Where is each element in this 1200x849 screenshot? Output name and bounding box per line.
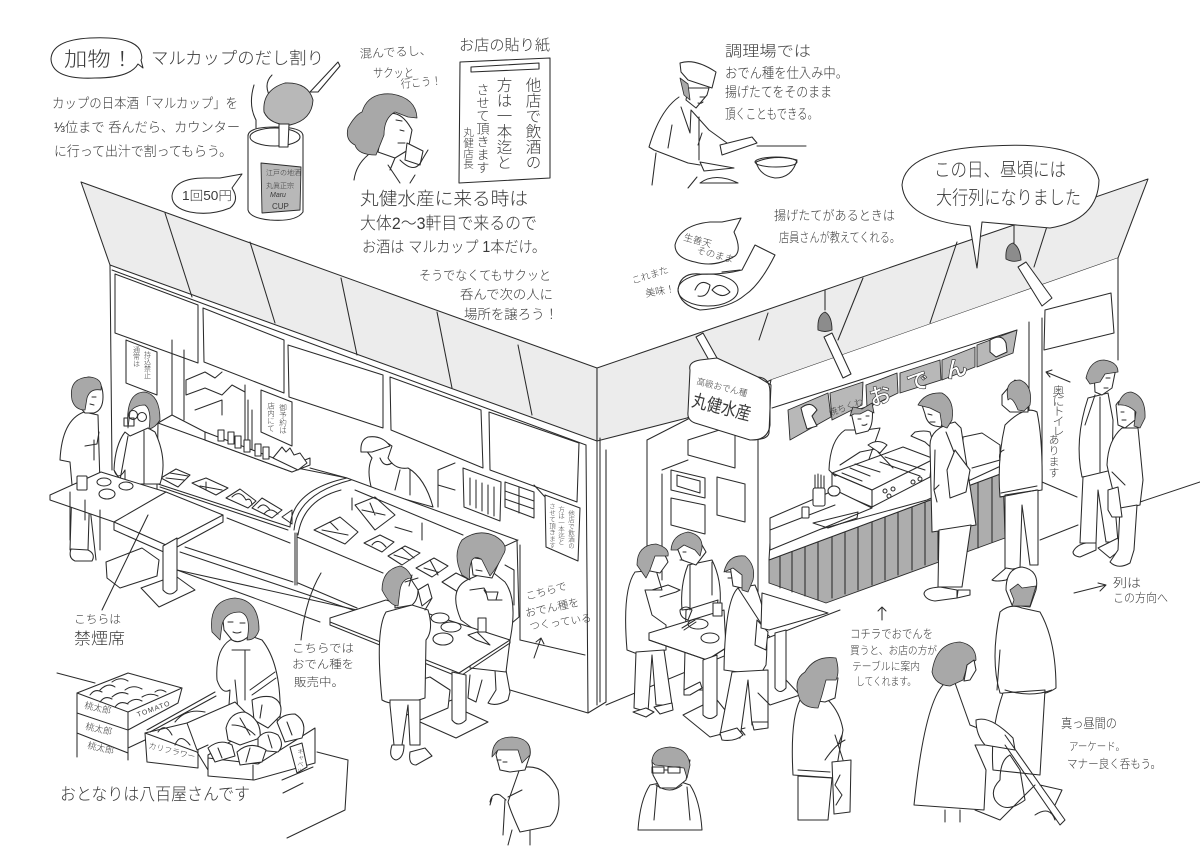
arrow: making oden bbox=[534, 638, 544, 658]
man from behind with stroller woman bbox=[914, 567, 1065, 825]
panel: right stall facade bbox=[597, 179, 1200, 705]
text block: manners bbox=[1061, 716, 1161, 771]
side panels bbox=[671, 425, 745, 534]
poster: shop notice: 方は一本迄と bbox=[494, 77, 512, 170]
arrow: order here bbox=[878, 607, 886, 620]
table top left bbox=[50, 472, 223, 545]
text block: how I visit: お酒は マルカップ 1本だけ。 bbox=[362, 238, 546, 256]
woman eating bbox=[456, 533, 514, 704]
text block: guide to table: テーブルに案内 bbox=[852, 659, 920, 673]
cup label: 江戸の地酒 bbox=[266, 168, 301, 177]
text block: toilet: 奥にトイレ bbox=[1051, 385, 1065, 436]
text block: give up your place: そうでなくてもサクッと bbox=[419, 268, 551, 283]
man waiting at counter bbox=[992, 380, 1042, 581]
poster: no outside alcohol: 持込禁止 bbox=[144, 350, 151, 379]
callout: straight-up fish cake bbox=[675, 218, 741, 266]
poster: price grid bbox=[505, 482, 534, 518]
person with glasses bottom bbox=[638, 747, 702, 830]
food trays bbox=[161, 469, 470, 592]
arrow: toilet bbox=[1046, 370, 1070, 382]
callout: add-on bubble: 加物！ bbox=[64, 48, 134, 71]
dishes right table bbox=[431, 613, 490, 645]
text block: how I visit: 丸健水産に来る時は bbox=[360, 189, 528, 209]
cup label: 丸眞正宗 bbox=[266, 181, 294, 190]
callout: long queue bbox=[902, 145, 1099, 268]
arrow: queue direction bbox=[1074, 583, 1106, 593]
right roof bbox=[597, 179, 1148, 441]
text block: toilet bbox=[1047, 385, 1065, 478]
toilet side window bbox=[1044, 293, 1114, 350]
vendor bbox=[829, 403, 887, 476]
text block: give up your place: 場所を譲ろう！ bbox=[464, 307, 558, 322]
people at corner table bbox=[626, 532, 828, 740]
noren curtain: 焼ちくわ bbox=[827, 396, 865, 418]
callout: long queue: この日、昼頃には bbox=[934, 159, 1066, 181]
poster: one cup only: 方は一本迄と bbox=[556, 505, 565, 545]
table leg bbox=[163, 538, 177, 594]
poster: menu scribble bbox=[463, 468, 501, 521]
poster: one cup only: させて頂きます bbox=[548, 503, 556, 549]
text block: crowded, go quick: 行こう！ bbox=[400, 74, 442, 91]
vegetable price tag bbox=[290, 743, 307, 774]
text block: maru cup explanation: ⅓位まで 呑んだら、カウンター bbox=[54, 120, 240, 135]
counter skirt bbox=[769, 465, 1005, 603]
poster: no outside alcohol: 通常は bbox=[132, 345, 140, 367]
elderly person with cane bbox=[490, 737, 559, 845]
low table bbox=[282, 752, 348, 838]
produce stand bbox=[57, 673, 348, 838]
text block: queue direction bbox=[1113, 576, 1168, 605]
table top right bbox=[330, 600, 510, 673]
noren curtain: ん bbox=[942, 354, 970, 384]
cup label: Maru bbox=[270, 192, 286, 199]
dishes corner table bbox=[682, 603, 722, 643]
poster: reservation: 御予約は bbox=[278, 403, 288, 434]
table leg right bbox=[452, 672, 466, 724]
panel: display case bbox=[155, 415, 519, 650]
text block: selling oden bbox=[292, 573, 354, 689]
noren top rail bbox=[772, 330, 1017, 408]
person 3 with shoulder bag bbox=[720, 556, 768, 740]
left fascia windows bbox=[115, 274, 579, 502]
text block: guide to table bbox=[850, 627, 937, 688]
text block: staff tells you: 揚げたてがあるときは bbox=[774, 208, 895, 223]
text block: selling oden: こちらでは bbox=[292, 642, 354, 655]
text block: queue direction: この方向へ bbox=[1113, 591, 1168, 605]
illustration: woman drinking cup bbox=[347, 94, 428, 183]
man standing at left table bbox=[60, 377, 103, 561]
text block: kitchen prep: おでん種を仕入み中。 bbox=[725, 65, 848, 81]
panel: left stall facade bbox=[81, 182, 606, 713]
cauliflower box bbox=[145, 692, 258, 770]
text block: give up your place: 呑んで次の人に bbox=[460, 287, 553, 302]
old woman shopping bbox=[211, 598, 280, 720]
man pointing at counter bbox=[911, 393, 976, 601]
text block: maru cup explanation bbox=[52, 96, 240, 159]
callout: straight-up fish cake: そのまま bbox=[695, 245, 735, 266]
tall man bbox=[1073, 360, 1120, 558]
illustration: bowl and hand bbox=[678, 245, 775, 310]
shop sign bbox=[688, 333, 771, 440]
callout: straight-up fish cake: 生善天 bbox=[682, 231, 713, 250]
cup bbox=[248, 127, 303, 220]
text block: crowded, go quick: サクッと bbox=[373, 66, 414, 80]
noren curtain: お bbox=[866, 381, 894, 411]
woman drinking with glasses bbox=[114, 392, 163, 484]
text block: no smoking seats: こちらは bbox=[74, 613, 121, 626]
noren curtain bbox=[788, 330, 1017, 440]
text block: making oden here bbox=[524, 581, 592, 633]
text block: staff tells you: 店員さんが教えてくれる。 bbox=[779, 230, 900, 245]
text block: guide to table: してくれます。 bbox=[856, 675, 916, 688]
corner table leg bbox=[703, 655, 717, 718]
text block: making oden here: こちらで bbox=[525, 581, 568, 603]
cup label bbox=[261, 163, 301, 213]
woman with tote bag bbox=[792, 658, 851, 820]
text block: crowded, go quick: 混んでるし、 bbox=[359, 43, 432, 61]
wall posters left bbox=[126, 340, 580, 561]
couple in line bbox=[1073, 360, 1145, 566]
text block: kitchen prep: 頂くこともできる。 bbox=[725, 106, 818, 122]
poster: reservation bbox=[261, 390, 292, 446]
tomato crates: 桃太郎 bbox=[84, 699, 112, 716]
heading: shop notice: お店の貼り紙 bbox=[459, 37, 550, 54]
text block: guide to table: コチラでおでんを bbox=[850, 627, 933, 641]
left roof bbox=[81, 182, 597, 441]
callout: long queue: 大行列になりました bbox=[936, 187, 1081, 209]
shelf cups and fish cakes bbox=[205, 430, 310, 472]
text block: queue direction: 列は bbox=[1113, 576, 1141, 590]
poster: shop notice: 他店で飲酒の bbox=[524, 77, 541, 170]
text block: manners: マナー良く呑もう。 bbox=[1067, 757, 1161, 771]
text block: neighbor greengrocer: おとなりは八百屋さんです bbox=[60, 785, 250, 804]
cauliflower box: カリフラワー bbox=[148, 741, 196, 762]
right table by display bbox=[330, 533, 514, 765]
wind chimes bbox=[818, 224, 1052, 378]
wind chime 2 bbox=[1006, 224, 1052, 306]
text block: give up your place bbox=[419, 268, 558, 322]
poster: one cup only bbox=[545, 495, 580, 561]
text block: this is also tasty: 美味！ bbox=[644, 282, 676, 300]
tomato crates: TOMATO bbox=[136, 700, 172, 719]
cup label: CUP bbox=[272, 202, 289, 211]
text block: kitchen prep bbox=[725, 43, 848, 122]
tomato crates: 桃太郎 bbox=[87, 739, 115, 756]
poster: reservation: 店内にて bbox=[266, 402, 276, 432]
man in sweater bbox=[992, 567, 1056, 775]
text block: making oden here: おでん種を bbox=[524, 596, 580, 620]
noren monkey mascots bbox=[801, 337, 1007, 429]
text block: kitchen prep: 調理場では bbox=[725, 43, 811, 60]
text block: how I visit: 大体2～3軒目で来るので bbox=[360, 214, 537, 233]
stroller bbox=[975, 719, 1065, 825]
vendor behind the case bbox=[361, 437, 433, 507]
text block: maru cup explanation: カップの日本酒「マルカップ」を bbox=[52, 96, 238, 111]
noren curtain: で bbox=[904, 367, 932, 397]
text block: no smoking seats bbox=[74, 515, 148, 648]
box under right table bbox=[392, 677, 450, 720]
text block: how I visit bbox=[360, 189, 546, 256]
shop sign: 高級おでん種 bbox=[696, 375, 749, 399]
box under table bbox=[106, 548, 159, 588]
text block: manners: 真っ昼間の bbox=[1061, 716, 1117, 731]
utensil cup bbox=[802, 474, 840, 518]
counter end table bbox=[761, 593, 828, 630]
man with glasses drinking bbox=[379, 566, 432, 765]
cabbages bbox=[208, 696, 315, 780]
person 2 bbox=[671, 532, 720, 695]
poster: shop notice: させて頂きます bbox=[474, 83, 490, 174]
woman in line bbox=[1107, 392, 1145, 566]
text block: making oden here: つくっている bbox=[529, 612, 592, 633]
callout: add-on bubble bbox=[51, 38, 143, 78]
text block: selling oden: 販売中。 bbox=[294, 676, 344, 689]
text block: no smoking seats: 禁煙席 bbox=[74, 630, 125, 648]
stroller woman bbox=[914, 642, 996, 822]
illustration: cook at kitchen bbox=[649, 62, 806, 188]
poster: shop notice: 丸健店長 bbox=[462, 127, 474, 170]
person 1 bbox=[626, 544, 692, 717]
vendor and grill bbox=[770, 403, 1000, 550]
counter shelf bbox=[770, 490, 872, 550]
poster: one cup only: 他店で飲酒の bbox=[566, 509, 575, 549]
oden pot bbox=[832, 447, 932, 507]
heading: maru cup dashi: マルカップのだし割り bbox=[151, 49, 324, 68]
callout: one time 50 yen: 1回50円 bbox=[182, 189, 232, 203]
text block: this is also tasty: これまた bbox=[631, 265, 670, 287]
text block: staff tells you bbox=[774, 208, 900, 245]
text block: this is also tasty bbox=[631, 265, 676, 300]
poster: no outside alcohol bbox=[126, 340, 157, 395]
text block: kitchen prep: 揚げたてをそのまま bbox=[725, 84, 832, 100]
shop sign: 丸健水産 bbox=[690, 390, 753, 424]
text block: toilet: あります bbox=[1047, 434, 1059, 478]
text block: crowded, go quick bbox=[359, 43, 442, 91]
tomato crates: 桃太郎 bbox=[85, 720, 113, 737]
spoon bbox=[264, 83, 313, 125]
text block: manners: アーケード。 bbox=[1069, 740, 1125, 753]
tomato crates bbox=[77, 673, 182, 760]
vegetable price tag: キャベツ bbox=[296, 748, 304, 774]
text block: selling oden: おでん種を bbox=[292, 658, 354, 671]
right wall bbox=[758, 258, 1118, 637]
corner table top bbox=[649, 610, 726, 660]
poster: shop notice bbox=[459, 58, 550, 183]
wind chime 1 bbox=[818, 290, 851, 378]
callout: one time 50 yen bbox=[172, 174, 242, 213]
text block: guide to table: 買うと、お店の方が bbox=[850, 644, 937, 657]
dishes on table bbox=[77, 476, 133, 499]
illustration: cup and spoon bbox=[248, 62, 340, 220]
text block: maru cup explanation: に行って出汁で割ってもらう。 bbox=[54, 144, 232, 159]
left table group bbox=[50, 377, 223, 607]
